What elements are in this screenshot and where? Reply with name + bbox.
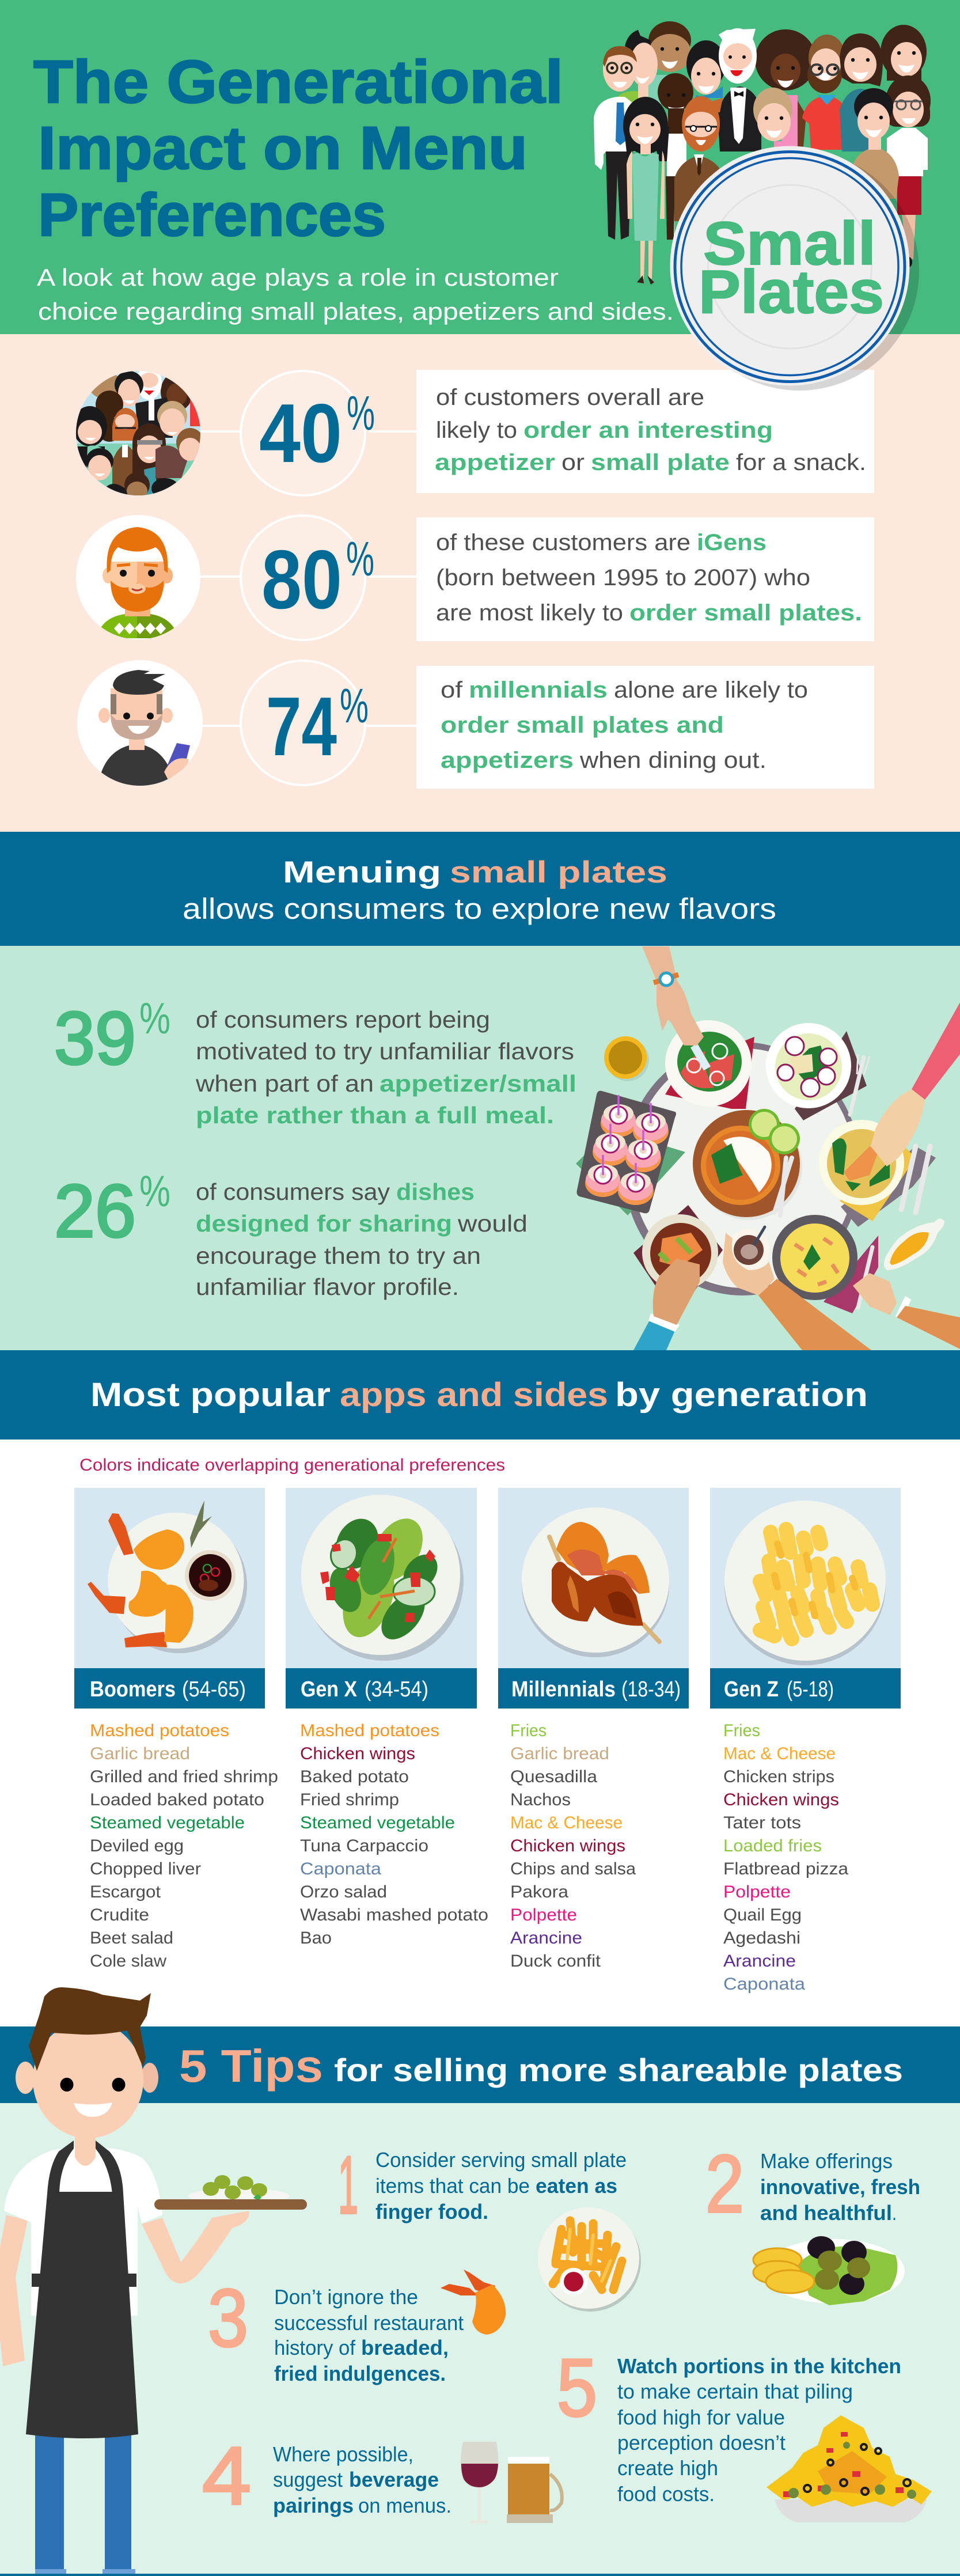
tip 5 — [557, 2342, 901, 2506]
list: Polpette — [510, 1906, 577, 1925]
subtitle: choice regarding small plates, appetizers and sides. — [38, 298, 674, 325]
list: Steamed vegetable — [90, 1813, 245, 1832]
person: tan man — [646, 21, 691, 104]
text box 2: iGens — [697, 530, 767, 555]
tip 1: finger food. — [375, 2200, 488, 2223]
tip 4 — [202, 2430, 451, 2522]
tip 2: . — [892, 2201, 897, 2225]
list: Arancine — [723, 1952, 796, 1971]
person: blond in pink — [753, 88, 792, 153]
list: Fries — [510, 1721, 547, 1740]
tip 1: eaten as — [536, 2174, 617, 2198]
avatar: man with phone — [77, 660, 203, 789]
list: Polpette — [723, 1882, 791, 1901]
tip 5: perception doesn’t — [617, 2431, 786, 2454]
person: right woman with glasses — [886, 75, 931, 267]
text: 26 percent: would — [457, 1210, 528, 1237]
label bar: (34-54) — [365, 1677, 428, 1702]
list: Beet salad — [90, 1929, 173, 1948]
list: Escargot — [90, 1882, 161, 1901]
list: Caponata — [723, 1975, 805, 1994]
tip 5: Watch portions in the kitchen — [617, 2354, 901, 2378]
label bar — [498, 1668, 689, 1709]
label bar: Gen Z — [724, 1677, 779, 1702]
text box 1: of customers overall are — [436, 385, 704, 410]
panel: flavors background — [0, 946, 960, 1350]
panel: flavors banner — [0, 832, 960, 946]
tip 2: innovative, fresh — [760, 2175, 920, 2199]
list: Pakora — [510, 1882, 568, 1901]
text box 2 — [416, 517, 874, 641]
list: Tater tots — [723, 1813, 801, 1832]
text box 3: of — [441, 677, 463, 703]
connector lines and ring — [200, 371, 416, 495]
tip 3 — [208, 2272, 464, 2385]
list: Chicken wings — [510, 1836, 625, 1855]
arms — [0, 2215, 28, 2366]
person: boy in tan sweater — [851, 88, 899, 199]
group of people illustration — [594, 21, 931, 285]
text box 3: alone are likely to — [614, 677, 808, 703]
tip 4: Where possible, — [273, 2442, 413, 2466]
list — [90, 1721, 278, 1971]
label bar — [74, 1668, 265, 1709]
label bar — [710, 1668, 901, 1709]
list: Orzo salad — [300, 1882, 387, 1901]
list: Garlic bread — [90, 1744, 190, 1763]
list: Crudite — [90, 1906, 149, 1925]
text box 2: order small plates. — [629, 600, 862, 626]
tip 2: 2 — [705, 2138, 744, 2230]
list: Mac & Cheese — [723, 1744, 836, 1763]
crowd avatar — [76, 371, 200, 495]
icon: wine glass and beer mug — [461, 2442, 562, 2523]
list — [510, 1721, 636, 1971]
stat: 39 percent: 39 — [54, 996, 136, 1080]
person: bearded man with glasses — [802, 35, 851, 150]
tip 2 — [705, 2138, 920, 2230]
icon: fried shrimp — [441, 2270, 506, 2335]
label bar: (54-65) — [182, 1677, 246, 1702]
list: Agedashi — [723, 1929, 800, 1948]
arm: bottom orange sleeves and hands — [758, 1273, 960, 1350]
heading: 5 tips: 5 Tips — [179, 2040, 323, 2092]
panel: tips background — [0, 2103, 960, 2574]
list: Quesadilla — [510, 1767, 597, 1786]
list: Fried shrimp — [300, 1790, 399, 1809]
tip 2: and healthful — [760, 2201, 892, 2225]
text box 3: appetizers — [441, 748, 574, 773]
person: woman in teal — [840, 33, 883, 151]
80 percent: % — [346, 532, 374, 586]
card: Boomers — [74, 1488, 278, 1971]
label bar: Gen X — [301, 1677, 358, 1702]
ears — [16, 2062, 158, 2094]
text box 1: order an interesting — [523, 418, 773, 443]
person: old man with white beard and tuxedo — [718, 28, 761, 151]
list: Deviled egg — [90, 1836, 184, 1855]
stat: 26 percent: 26 — [54, 1169, 136, 1253]
tip 3: breaded, — [361, 2336, 449, 2359]
text: 39 percent: when part of an — [195, 1070, 374, 1097]
tip 3: fried indulgences. — [274, 2362, 446, 2385]
text: 26 percent: encourage them to try an — [196, 1242, 481, 1269]
list: Chips and salsa — [510, 1859, 636, 1878]
text box 3: order small plates and — [441, 713, 724, 738]
card: Millennials — [498, 1488, 689, 1971]
text: 39 percent: of consumers report being — [196, 1006, 490, 1033]
neck — [75, 2131, 96, 2166]
tip 1: Consider serving small plate — [375, 2148, 627, 2172]
tip 4: beverage — [349, 2468, 439, 2491]
title: Impact on Menu — [38, 115, 528, 182]
list: Mac & Cheese — [510, 1813, 623, 1832]
gravy boat — [884, 1218, 944, 1270]
label bar — [286, 1668, 477, 1709]
list: Duck confit — [510, 1952, 601, 1971]
person: glasses man in white shirt — [594, 46, 637, 240]
arm: right pink sleeve and hand — [871, 1002, 960, 1166]
list: Arancine — [510, 1929, 582, 1948]
hair — [29, 1987, 151, 2071]
text: 26 percent: dishes — [396, 1179, 475, 1205]
label bar: (5-18) — [787, 1677, 834, 1702]
list: Chicken wings — [300, 1744, 415, 1763]
text: 26 percent — [196, 1179, 528, 1300]
heading: menuing small plates — [183, 855, 776, 925]
person: back woman right — [881, 25, 927, 81]
text box 3: when dining out. — [579, 748, 767, 773]
heading: most popular apps and sides: by generation — [615, 1376, 868, 1414]
plate badge: Small Plates — [670, 146, 919, 391]
tip 5: food costs. — [617, 2482, 715, 2506]
text: 39 percent: plate rather than a full meal. — [196, 1102, 554, 1128]
icon: salad plate — [301, 1495, 464, 1661]
canape tray with napkin — [576, 1091, 685, 1215]
footer bar — [0, 2574, 960, 2576]
pasta plate with magenta napkin — [772, 1215, 878, 1313]
label bar: (18-34) — [621, 1677, 681, 1702]
stat: 39 percent: % — [139, 994, 170, 1043]
face — [33, 2021, 143, 2138]
tip 4: pairings — [273, 2494, 354, 2517]
heading: menuing small plates: Menuing — [283, 855, 441, 889]
heading: 5 tips — [179, 2040, 903, 2092]
subtitle: A look at how age plays a role in customer — [37, 264, 559, 291]
text: 39 percent: motivated to try unfamiliar flavors — [196, 1038, 574, 1065]
heading: menuing small plates: small plates — [450, 855, 667, 889]
tip 4: on menus. — [358, 2494, 451, 2517]
list: Flatbread pizza — [723, 1859, 848, 1878]
title: The Generational — [33, 48, 563, 116]
list: Grilled and fried shrimp — [90, 1767, 278, 1786]
person: red-bearded man in suit — [674, 96, 723, 221]
40 percent: 40 — [259, 387, 342, 480]
list: Bao — [300, 1929, 332, 1948]
tip 5: to make certain that piling — [617, 2380, 853, 2403]
panel: generation list background — [0, 1439, 960, 2026]
arm: bottom left hand with blue sleeve — [633, 1259, 700, 1350]
person: dark man — [658, 73, 693, 240]
text: 26 percent: designed for sharing — [196, 1210, 452, 1237]
bowl with napkin — [633, 1205, 723, 1296]
list: Wasabi mashed potato — [300, 1906, 488, 1925]
person: afro woman — [755, 29, 816, 147]
text box 1: for a snack. — [736, 450, 866, 475]
tip 3: 3 — [208, 2272, 248, 2364]
list: Mashed potatoes — [90, 1721, 229, 1740]
text: 26 percent: of consumers say — [196, 1179, 390, 1205]
panel: generation banner — [0, 1350, 960, 1439]
tip 1 — [338, 2139, 627, 2231]
list: Caponata — [300, 1859, 381, 1878]
text box 1: small plate — [591, 450, 730, 475]
list: Garlic bread — [510, 1744, 609, 1763]
tip 4: suggest — [273, 2468, 343, 2491]
40 percent: % — [347, 386, 375, 440]
illustration: shared table of dishes — [576, 946, 960, 1350]
card: Gen Z — [710, 1488, 901, 1994]
list: Chicken wings — [723, 1790, 839, 1809]
plate badge: Small Plates: Small — [703, 210, 876, 278]
list: Nachos — [510, 1790, 571, 1809]
icon: chicken wings plate — [522, 1507, 669, 1657]
person: dark-haired man — [686, 40, 726, 98]
label bar: Boomers — [90, 1677, 176, 1702]
connector lines and ring — [200, 516, 416, 640]
hand holding cup — [723, 1233, 775, 1296]
centre curry dish with limes — [693, 1109, 802, 1220]
connector lines and ring — [203, 661, 416, 785]
card: Gen X — [286, 1488, 488, 1948]
stat row 3 — [77, 660, 874, 789]
person: back man in green — [617, 30, 658, 107]
legs — [35, 2434, 135, 2574]
list: Loaded baked potato — [90, 1790, 264, 1809]
text box 2: of these customers are — [436, 530, 690, 555]
list: Cole slaw — [90, 1952, 166, 1971]
tip 1: items that can be — [375, 2174, 530, 2198]
80 percent: 80 — [261, 533, 342, 626]
avatar: red-bearded man — [76, 515, 200, 639]
table — [624, 1042, 861, 1295]
text box 2: (born between 1995 to 2007) who — [436, 565, 810, 590]
list: Quail Egg — [723, 1906, 802, 1925]
apron — [26, 2141, 138, 2438]
heading: most popular apps and sides — [90, 1376, 868, 1414]
list: Steamed vegetable — [300, 1813, 455, 1832]
subtitle — [37, 264, 674, 325]
text box 1: or — [561, 450, 585, 475]
text box 2: are most likely to — [436, 600, 623, 626]
legend note: Colors indicate overlapping generational preferences — [79, 1456, 505, 1475]
list: Mashed potatoes — [300, 1721, 439, 1740]
icon: olives and lemon plate — [753, 2236, 905, 2305]
plate badge: Small Plates: Plates — [699, 258, 884, 326]
list: Fries — [723, 1721, 760, 1740]
stat row 2 — [76, 515, 874, 641]
tip 5: food high for value — [617, 2405, 785, 2429]
right arm and hand — [142, 2211, 249, 2283]
74 percent: 74 — [266, 680, 337, 773]
yellow napkin, plate with salmon — [819, 1120, 936, 1227]
tip 3: Don’t ignore the — [274, 2285, 418, 2309]
arm: top hand with watch — [642, 946, 704, 1045]
waiter illustration — [0, 1987, 307, 2574]
title — [33, 48, 563, 249]
list: Baked potato — [300, 1767, 409, 1786]
list: Chopped liver — [90, 1859, 201, 1878]
shirt — [4, 2147, 162, 2316]
icon: fries plate — [538, 2207, 641, 2312]
tip 1: 1 — [338, 2139, 358, 2231]
heading: menuing small plates: allows consumers to explore new flavors — [183, 892, 776, 925]
text box 3: millennials — [469, 677, 608, 703]
text: 39 percent — [195, 1006, 576, 1128]
tip 4: 4 — [202, 2430, 251, 2522]
person: front woman in mint dress — [623, 97, 669, 285]
heading: most popular apps and sides: apps and sides — [340, 1376, 608, 1414]
text: 26 percent: unfamiliar flavor profile. — [196, 1274, 459, 1300]
tip 5: create high — [617, 2456, 718, 2480]
text box 1: appetizer — [435, 450, 555, 475]
list: Chicken strips — [723, 1767, 834, 1786]
list — [723, 1721, 848, 1994]
icon: shrimp plate — [88, 1501, 247, 1653]
list: Loaded fries — [723, 1836, 822, 1855]
74 percent: % — [340, 679, 369, 733]
salad plate with napkin — [665, 1020, 754, 1109]
tip 3: history of — [274, 2336, 356, 2359]
heading: 5 tips: for selling more shareable plates — [334, 2052, 903, 2088]
heading: most popular apps and sides: Most popular — [90, 1376, 331, 1414]
sauce cup — [604, 1036, 649, 1081]
text box 3 — [416, 666, 874, 789]
tray with sprouts — [154, 2175, 307, 2210]
stat: 26 percent: % — [139, 1167, 170, 1216]
text box 1: likely to — [436, 418, 517, 443]
tip 3: successful restaurant — [274, 2311, 464, 2335]
icon: mac and cheese plate — [724, 1501, 886, 1665]
salad plate with fork — [766, 1023, 870, 1120]
text: 39 percent: appetizer/small — [380, 1070, 576, 1097]
cup — [728, 1227, 769, 1271]
title: Preferences — [38, 181, 386, 249]
icon: plate of nachos — [767, 2415, 932, 2522]
list: Tuna Carpaccio — [300, 1836, 428, 1855]
tip 2: Make offerings — [760, 2149, 893, 2173]
panel: statistics background — [0, 334, 960, 832]
text box 1 — [416, 370, 874, 493]
tip 5: 5 — [557, 2342, 597, 2434]
panel: header background — [0, 0, 960, 334]
label bar: Millennials — [511, 1677, 616, 1702]
panel: tips banner — [0, 2026, 960, 2103]
stat row 1 — [73, 365, 874, 502]
list — [300, 1721, 488, 1948]
